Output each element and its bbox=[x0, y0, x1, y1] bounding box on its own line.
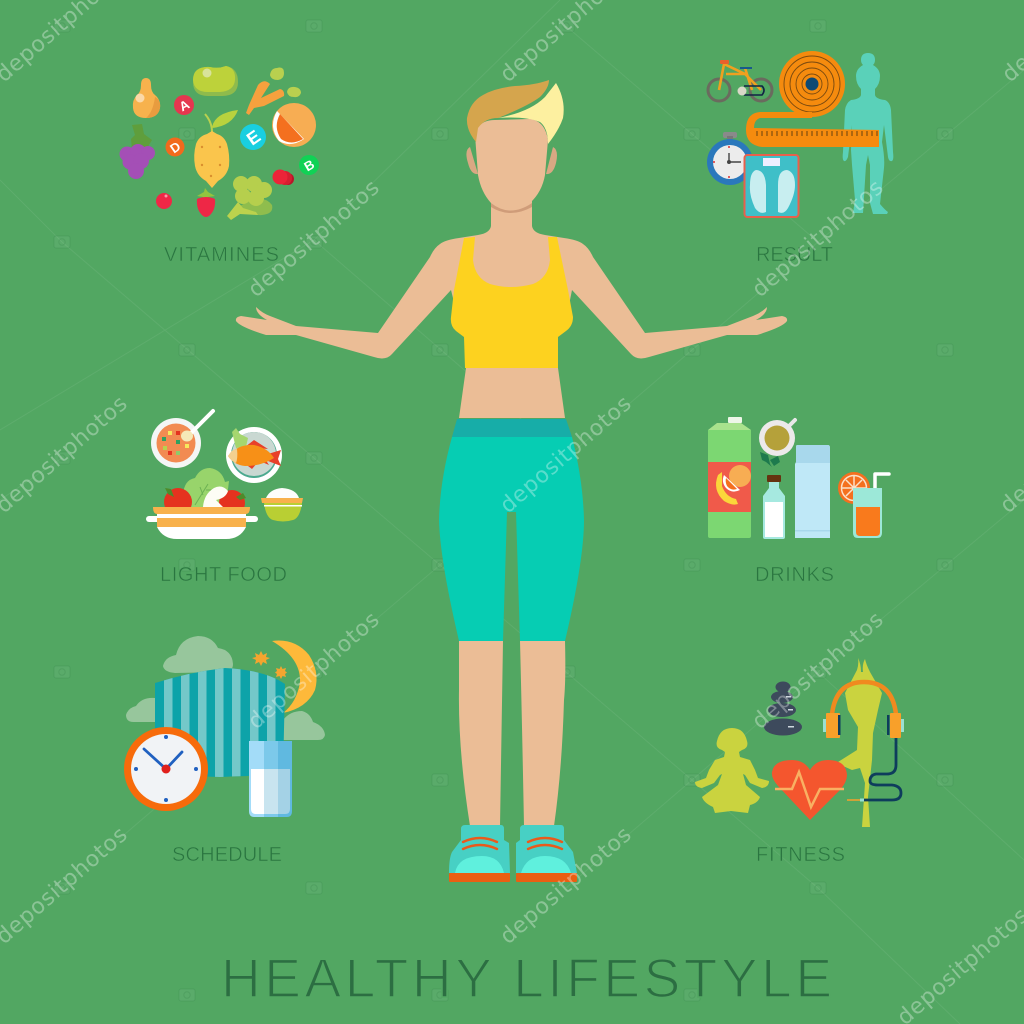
figure skin: neck, arms, torso bbox=[236, 200, 787, 418]
icon: lemon bbox=[194, 110, 238, 188]
figure shoe left bbox=[449, 825, 510, 882]
figure hair blond bbox=[498, 83, 564, 144]
icon: milk bottle bbox=[763, 475, 785, 539]
label: result: RESULT bbox=[756, 244, 833, 266]
icon: orange bbox=[272, 103, 316, 147]
icon: vitamin A bbox=[174, 95, 194, 115]
figure shoe right bbox=[516, 825, 577, 882]
figure legs bbox=[459, 641, 565, 826]
icon: crescent moon bbox=[272, 641, 317, 713]
label: drinks: DRINKS bbox=[755, 564, 834, 586]
icon: meditation figure bbox=[695, 728, 769, 813]
icon: vitamin D: D bbox=[167, 139, 183, 156]
icon: tree pose figure bbox=[838, 658, 882, 827]
panel: light food bbox=[146, 411, 303, 586]
icon: cherries bbox=[272, 170, 294, 185]
icon: stars bbox=[252, 651, 287, 679]
icon: green apple bbox=[193, 66, 238, 96]
icon: milk carton bbox=[795, 445, 830, 538]
icon: broccoli bbox=[227, 176, 272, 220]
figure hair brown bbox=[467, 80, 549, 142]
figure shorts bbox=[439, 437, 584, 641]
figure waistband bbox=[452, 419, 572, 437]
icon: stopwatch bbox=[707, 132, 753, 185]
icon: red berry bbox=[156, 193, 172, 209]
watermark text: depositphotos bbox=[748, 175, 888, 303]
figure chin shadow bbox=[491, 203, 532, 213]
central figure: woman in sportswear bbox=[236, 80, 787, 882]
icon: wall clock bbox=[124, 727, 208, 811]
icon: zen stones bbox=[764, 682, 802, 736]
icon: orange slice bbox=[838, 472, 870, 504]
watermark text: depositphotos bbox=[748, 607, 888, 735]
label: fitness: FITNESS bbox=[756, 844, 845, 866]
icon: bathroom scale bbox=[744, 155, 798, 217]
icon: woman silhouette bbox=[843, 53, 893, 214]
icon: striped blanket bbox=[155, 668, 285, 777]
icon: vitamin A: A bbox=[177, 96, 192, 114]
icon: strawberry bbox=[197, 188, 215, 217]
watermark text: depositphotos bbox=[244, 607, 384, 735]
icon: juice carton bbox=[708, 417, 751, 538]
title: HEALTHY LIFESTYLE bbox=[221, 947, 832, 1009]
icon: vitamin B bbox=[299, 155, 319, 175]
watermark text: depositphotos bbox=[244, 175, 384, 303]
icon: fish plate bbox=[226, 427, 282, 483]
icon: heart with pulse bbox=[772, 760, 847, 820]
panel: result bbox=[707, 51, 893, 266]
icon: bicycle bbox=[708, 60, 772, 101]
icon: headphones bbox=[823, 682, 904, 800]
icon: rice bowl bbox=[261, 488, 303, 522]
icon: juice glass bbox=[853, 474, 889, 538]
icon: carrots bbox=[246, 68, 301, 115]
icon: measuring tape band bbox=[746, 112, 879, 147]
figure yellow tank top bbox=[451, 237, 573, 368]
label: light food: LIGHT FOOD bbox=[160, 564, 287, 586]
panel: fitness bbox=[695, 658, 904, 866]
watermark text: depositphotos bbox=[496, 822, 636, 950]
figure ears bbox=[466, 147, 557, 174]
icon: salad bowl bbox=[146, 468, 258, 539]
figure face bbox=[475, 119, 548, 208]
panel: vitamines bbox=[120, 66, 319, 266]
icon: soup bowl bbox=[151, 411, 213, 468]
icon: measuring tape roll bbox=[779, 51, 845, 117]
icon: grapes bbox=[120, 124, 155, 179]
panel: schedule bbox=[124, 636, 325, 866]
label: schedule: SCHEDULE bbox=[172, 844, 282, 866]
watermark text: depositphotos bbox=[496, 391, 636, 519]
label: vitamines: VITAMINES bbox=[164, 244, 279, 266]
panel: drinks bbox=[708, 417, 889, 586]
icon: pear bbox=[133, 78, 160, 118]
icon: vitamin B: B bbox=[301, 157, 317, 174]
icon: glass of milk bbox=[249, 741, 292, 817]
icon: tea cup bbox=[759, 420, 795, 467]
icon: clouds bbox=[126, 636, 325, 740]
icon: vitamin E: E bbox=[243, 126, 264, 149]
